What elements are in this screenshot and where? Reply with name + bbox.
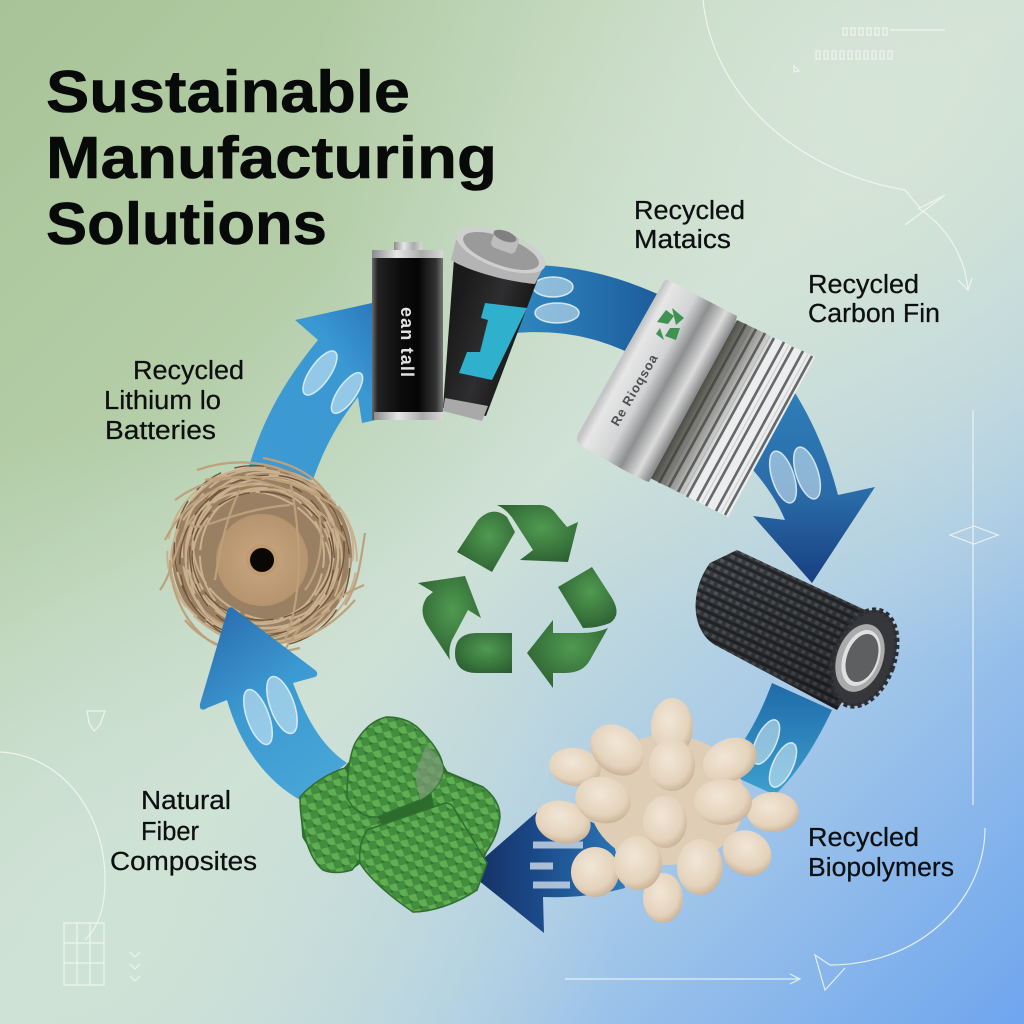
label: recycled metals: Recycled: [634, 197, 745, 225]
arrow: metal to roller: [730, 385, 875, 583]
label: natural fiber composites: Composites: [110, 848, 257, 876]
icon: recycling symbol: [418, 505, 617, 688]
label: recycled biopolymers: Recycled: [808, 824, 919, 852]
icon: fiber nest: [139, 431, 385, 681]
label: recycled carbon fiber: Recycled: [808, 271, 919, 299]
icon: recycled metal cylinder: [577, 280, 815, 517]
circular arrows: [248, 265, 875, 933]
label: recycled biopolymers: [808, 824, 954, 882]
label: recycled metals: [634, 197, 745, 254]
label: recycled lithium batteries: Lithium lo: [104, 387, 221, 415]
label: recycled lithium batteries: Recycled: [133, 357, 244, 385]
label: natural fiber composites: Natural: [141, 787, 231, 815]
battery: tilted: [443, 217, 551, 421]
arrow: green to nest: [200, 607, 347, 800]
water highlights on lower left arrow: [238, 673, 304, 748]
arrow: roller to biopolymers: [720, 683, 832, 795]
icon: batteries: [372, 217, 551, 421]
water highlights: [297, 277, 826, 885]
label: natural fiber composites: Fiber: [141, 818, 199, 846]
icon: green fiber blocks: [300, 717, 500, 912]
icon: small recycle mark: [656, 308, 684, 340]
title: [46, 59, 497, 257]
arrow: batteries to metal: [515, 265, 660, 352]
title: Sustainable: [46, 59, 410, 125]
icon: rubber roller: [696, 550, 909, 715]
label: recycled lithium batteries: [104, 357, 244, 445]
icon: recycled metal cylinder: Re Rioqsoa: [608, 351, 661, 428]
label: recycled metals: Mataics: [634, 226, 731, 254]
label: natural fiber composites: [110, 787, 257, 876]
label: recycled biopolymers: Biopolymers: [808, 854, 954, 882]
title: Solutions: [46, 191, 327, 257]
label: recycled carbon fiber: [808, 271, 940, 328]
label: recycled lithium batteries: Batteries: [105, 417, 216, 445]
battery: upright: [372, 242, 443, 420]
icon: biopolymer beads: [531, 698, 799, 923]
label: recycled carbon fiber: Carbon Fin: [808, 300, 940, 328]
title: Manufacturing: [46, 125, 497, 191]
arrow: biopolymers to green: [468, 803, 625, 933]
arrow: nest to batteries: [248, 303, 376, 480]
battery: upright: ean tall: [397, 307, 417, 377]
